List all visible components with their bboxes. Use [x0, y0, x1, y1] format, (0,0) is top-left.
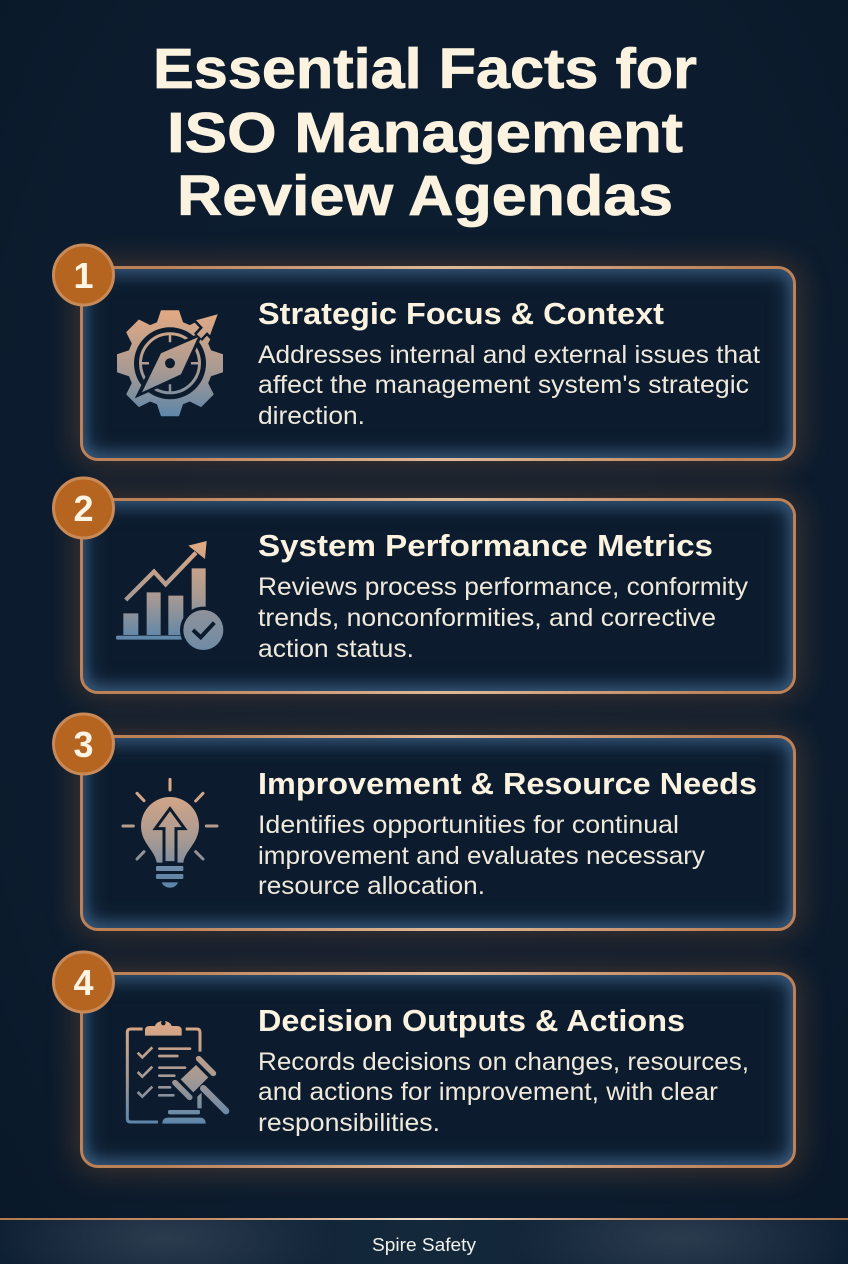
badge: number 3: [54, 714, 114, 774]
badge: number 3: 3: [73, 724, 94, 765]
badge: number 1: 1: [73, 255, 94, 296]
badge: number 4: 4: [73, 962, 94, 1003]
badge: number 1: [54, 245, 114, 305]
footer text: Spire Safety: Spire Safety: [372, 1235, 476, 1255]
description: Records decisions on changes, resources,: [258, 1048, 749, 1076]
panel: strategic focus and context: [52, 244, 814, 479]
description: trends, nonconformities, and corrective: [258, 604, 716, 632]
title: ISO Management: [167, 101, 683, 165]
description: [258, 811, 706, 900]
badge: number 2: 2: [73, 488, 94, 529]
title: [153, 37, 697, 228]
heading: Strategic Focus & Context: [258, 296, 664, 331]
panel: decision outputs and actions: [52, 950, 814, 1186]
description: action status.: [258, 635, 414, 663]
icon: light bulb with up arrow: [123, 779, 217, 888]
icon: gear with compass and arrow: [117, 310, 223, 416]
heading: Decision Outputs & Actions: [258, 1003, 685, 1038]
title: Review Agendas: [177, 164, 673, 228]
heading: Improvement & Resource Needs: [258, 766, 757, 801]
icon: clipboard checklist and gavel: [127, 1021, 226, 1124]
description: [258, 341, 760, 430]
description: affect the management system's strategic: [258, 371, 749, 399]
description: [258, 573, 749, 663]
description: resource allocation.: [258, 872, 485, 900]
footer divider line: [0, 1218, 848, 1220]
description: Identifies opportunities for continual: [258, 811, 679, 839]
description: Reviews process performance, conformity: [258, 573, 749, 601]
heading: System Performance Metrics: [258, 528, 713, 563]
footer band: [0, 1218, 848, 1264]
badge: number 2: [54, 478, 114, 538]
icon: rising bar chart with check: [116, 541, 227, 653]
description: direction.: [258, 402, 365, 430]
panel: system performance metrics: [52, 476, 814, 712]
description: and actions for improvement, with clear: [258, 1078, 718, 1106]
description: Addresses internal and external issues that: [258, 341, 760, 369]
description: responsibilities.: [258, 1109, 440, 1137]
title: Essential Facts for: [153, 37, 697, 101]
description: improvement and evaluates necessary: [258, 842, 706, 870]
badge: number 4: [54, 952, 114, 1012]
description: [258, 1048, 749, 1137]
panel: improvement and resource needs: [52, 712, 814, 949]
